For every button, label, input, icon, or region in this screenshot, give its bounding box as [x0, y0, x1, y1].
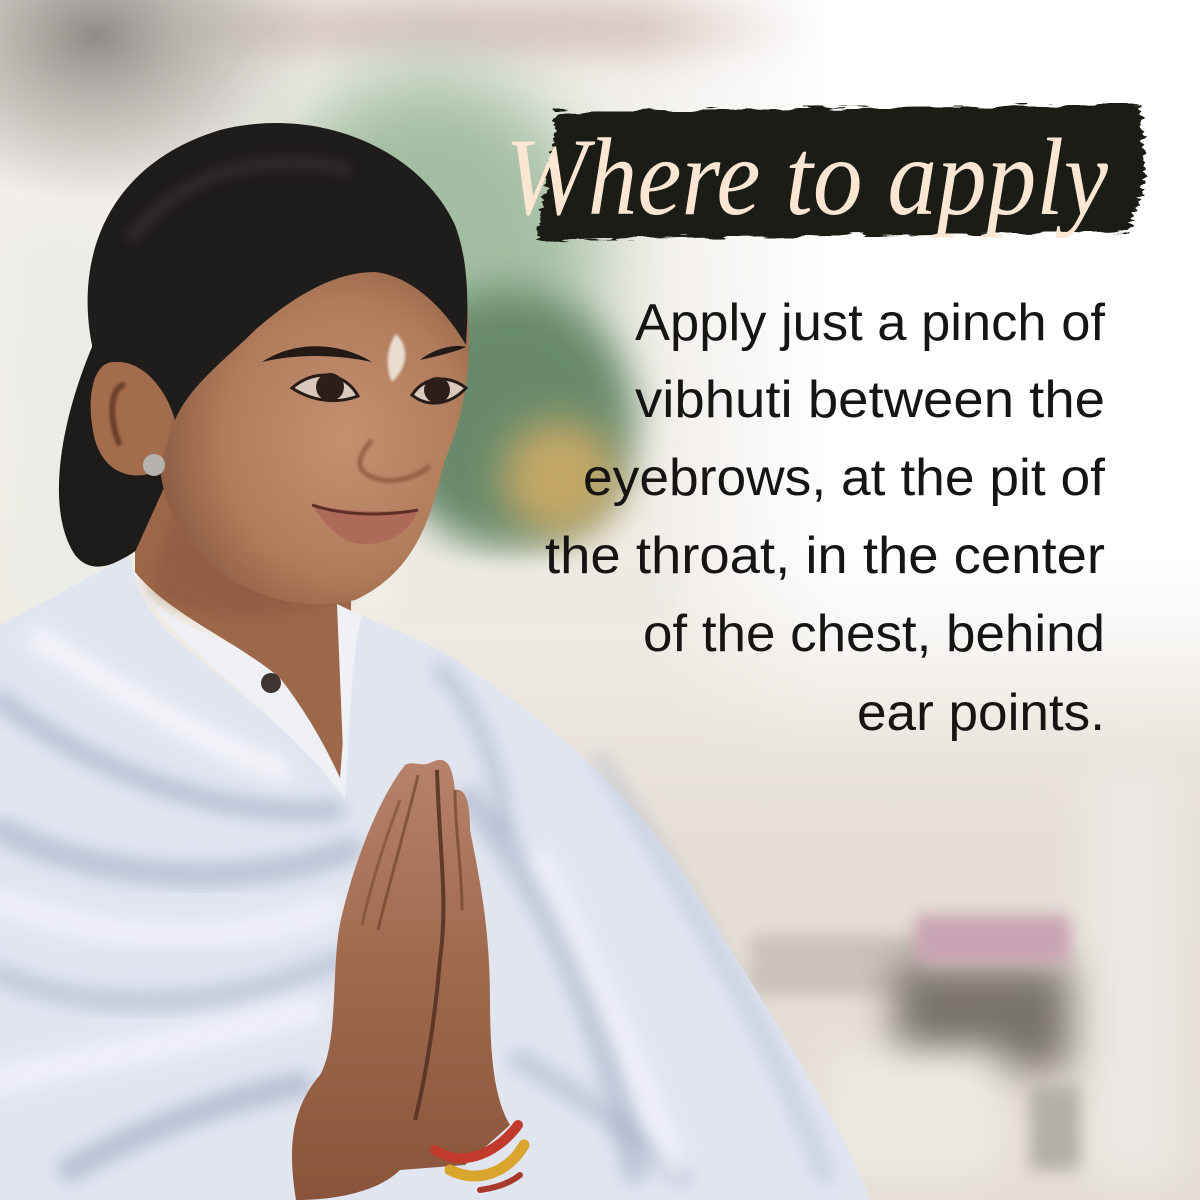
- body text: where to apply instructions: of the chest, behind: [643, 605, 1105, 663]
- body text: where to apply instructions: the throat, in the center: [545, 527, 1105, 585]
- hair bun: [59, 340, 190, 567]
- person: woman with palms joined, in white: [0, 123, 870, 1200]
- pressed hands: [292, 760, 510, 1200]
- mouth: [312, 505, 418, 544]
- button: [261, 673, 281, 693]
- nose: [360, 440, 430, 481]
- white shawl body: [0, 555, 870, 1200]
- heading: Where to apply: Where to apply: [505, 116, 1108, 238]
- earring: [143, 454, 165, 476]
- shawl lapel: [337, 604, 362, 800]
- eyes: [292, 375, 358, 401]
- shawl folds: [0, 640, 825, 1175]
- inner kurta collar: [140, 590, 350, 800]
- tilak: [388, 334, 405, 382]
- body text: where to apply instructions: eyebrows, at the pit of: [583, 449, 1106, 507]
- hair top: [88, 123, 467, 420]
- ear: [91, 362, 175, 475]
- face: [158, 258, 469, 604]
- neck: [135, 470, 352, 778]
- body text: where to apply instructions: ear points.: [857, 684, 1105, 742]
- eyebrows: [262, 346, 372, 362]
- heading banner: black brush stroke: [536, 104, 1146, 240]
- bracelet threads: [435, 1125, 524, 1190]
- body text: where to apply instructions: [545, 294, 1106, 742]
- body text: where to apply instructions: Apply just a pinch of: [635, 294, 1106, 352]
- body text: where to apply instructions: vibhuti between the: [635, 371, 1105, 429]
